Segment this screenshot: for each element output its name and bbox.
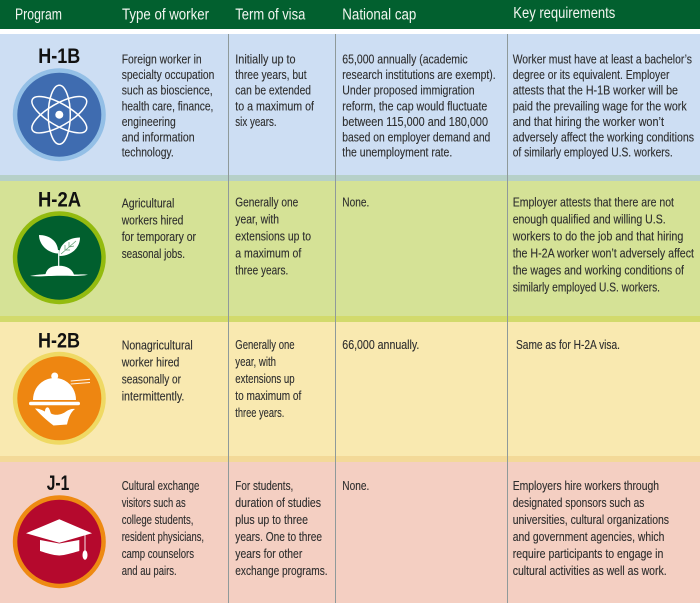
text: H-1B type of worker: [122, 52, 214, 160]
text: H-1B term of visa: Initially up to: [235, 52, 296, 66]
text: H-2A term of visa: [235, 196, 311, 278]
panel: H-1B row: [0, 34, 700, 181]
text: H-2B term of visa: [235, 338, 302, 420]
text: J-1 key requirements: Employers hire workers through: [513, 479, 659, 493]
text: H-2A type of worker: for temporary or: [122, 230, 196, 244]
text: J-1 key requirements: cultural activities as well as work.: [513, 564, 667, 578]
header bar: Program: [15, 6, 62, 24]
text: H-1B type of worker: health care, finance,: [122, 99, 213, 113]
text: H-2A term of visa: three years.: [235, 264, 288, 278]
text: H-1B term of visa: [235, 52, 314, 129]
text: H-1B national cap: the unemployment rate.: [342, 146, 452, 160]
text: H-1B term of visa: can be extended: [235, 84, 311, 98]
text: H-2A key requirements: [512, 196, 694, 295]
text: J-1 key requirements: universities, cultural organizations: [513, 513, 669, 527]
heading: J-1: J-1: [47, 471, 69, 495]
text: J-1 type of worker: resident physicians,: [122, 530, 204, 544]
text: H-1B national cap: reform, the cap would fluctuate: [342, 99, 487, 113]
text: J-1 term of visa: plus up to three: [235, 513, 308, 527]
text: H-1B national cap: 65,000 annually (academic: [342, 52, 468, 66]
text: H-1B type of worker: Foreign worker in: [122, 52, 202, 66]
text: H-2B key requirements: Same as for H-2A visa.: [516, 338, 620, 352]
text: J-1 key requirements: and government agencies, which: [513, 530, 664, 544]
text: H-2B term of visa: year, with: [235, 355, 276, 369]
text: H-2A key requirements: similarly employed U.S. workers.: [513, 281, 660, 295]
icon: atom: [13, 68, 106, 161]
text: J-1 term of visa: exchange programs.: [235, 564, 328, 578]
text: H-1B national cap: research institutions are exempt).: [342, 68, 496, 82]
text: J-1 key requirements: [513, 479, 669, 578]
icon: serving cloche: [13, 352, 106, 445]
header bar: Key requirements: [513, 5, 615, 22]
heading: H-1B: H-1B: [38, 44, 80, 68]
text: J-1 key requirements: designated sponsors such as: [513, 496, 644, 510]
text: H-1B national cap: Under proposed immigration: [342, 84, 475, 98]
icon: seedling: [13, 211, 106, 304]
heading: H-2B: H-2B: [38, 328, 80, 352]
panel: H-2B row: [0, 322, 700, 462]
text: H-1B term of visa: to a maximum of: [235, 99, 314, 113]
text: H-2A term of visa: a maximum of: [235, 247, 302, 261]
text: H-1B type of worker: such as bioscience,: [122, 84, 213, 98]
text: J-1 national cap: None.: [342, 479, 369, 493]
text: H-2B type of worker: intermittently.: [122, 389, 184, 403]
text: H-1B type of worker: specialty occupation: [122, 68, 214, 82]
text: H-1B type of worker: and information: [122, 130, 195, 144]
text: H-2B national cap: 66,000 annually.: [342, 338, 419, 352]
text: H-2A type of worker: seasonal jobs.: [122, 247, 185, 261]
header bar: [0, 0, 700, 29]
text: J-1 term of visa: duration of studies: [235, 496, 321, 510]
text: J-1 type of worker: and au pairs.: [122, 564, 177, 578]
text: H-2A term of visa: Generally one: [235, 196, 298, 210]
header bar: Term of visa: [235, 6, 306, 24]
text: H-1B key requirements: [513, 52, 694, 160]
text: H-1B national cap: based on employer demand and: [342, 130, 490, 144]
panel: H-2A row: [0, 181, 700, 322]
text: H-2A term of visa: year, with: [235, 213, 279, 227]
text: H-2B term of visa: to maximum of: [235, 389, 302, 403]
text: J-1 type of worker: [122, 479, 204, 578]
header bar: Type of worker: [122, 6, 209, 24]
text: H-1B key requirements: degree or its equivalent. Employer: [513, 68, 669, 82]
text: H-1B term of visa: six years.: [235, 115, 277, 129]
text: J-1 term of visa: years for other: [235, 547, 302, 561]
text: H-2A key requirements: enough qualified and willing U.S.: [513, 213, 666, 227]
text: H-2B type of worker: [121, 338, 193, 403]
text: H-1B term of visa: three years, but: [235, 68, 307, 82]
text: H-2A type of worker: [121, 196, 196, 261]
text: J-1 type of worker: camp counselors: [122, 547, 194, 561]
text: J-1 type of worker: visitors such as: [122, 496, 186, 510]
text: J-1 term of visa: years. One to three: [235, 530, 322, 544]
text: H-1B national cap: between 115,000 and 180,000: [342, 115, 488, 129]
text: H-2B term of visa: Generally one: [235, 338, 295, 352]
text: J-1 type of worker: college students,: [122, 513, 193, 527]
header bar: National cap: [342, 6, 416, 24]
text: H-1B key requirements: and that hiring the worker won’t: [513, 115, 664, 129]
text: H-2B type of worker: worker hired: [121, 355, 179, 369]
icon: graduation cap: [13, 495, 106, 588]
text: J-1 term of visa: For students,: [235, 479, 293, 493]
text: J-1 term of visa: [235, 479, 328, 578]
panel: J-1 row: [0, 462, 700, 603]
text: H-1B type of worker: technology.: [122, 146, 174, 160]
text: H-1B type of worker: engineering: [122, 115, 176, 129]
text: H-2A national cap: None.: [342, 196, 369, 210]
text: H-2B type of worker: Nonagricultural: [122, 338, 193, 352]
text: H-2B term of visa: three years.: [235, 406, 284, 420]
text: H-2B term of visa: extensions up: [235, 372, 295, 386]
text: H-2B type of worker: seasonally or: [122, 372, 181, 386]
text: H-2A type of worker: Agricultural: [122, 196, 174, 210]
text: H-2A term of visa: extensions up to: [235, 230, 311, 244]
text: H-2A type of worker: workers hired: [121, 213, 183, 227]
text: J-1 key requirements: require participants to engage in: [513, 547, 663, 561]
text: H-1B national cap: [342, 52, 496, 160]
heading: H-2A: H-2A: [38, 188, 81, 212]
text: J-1 type of worker: Cultural exchange: [122, 479, 199, 493]
